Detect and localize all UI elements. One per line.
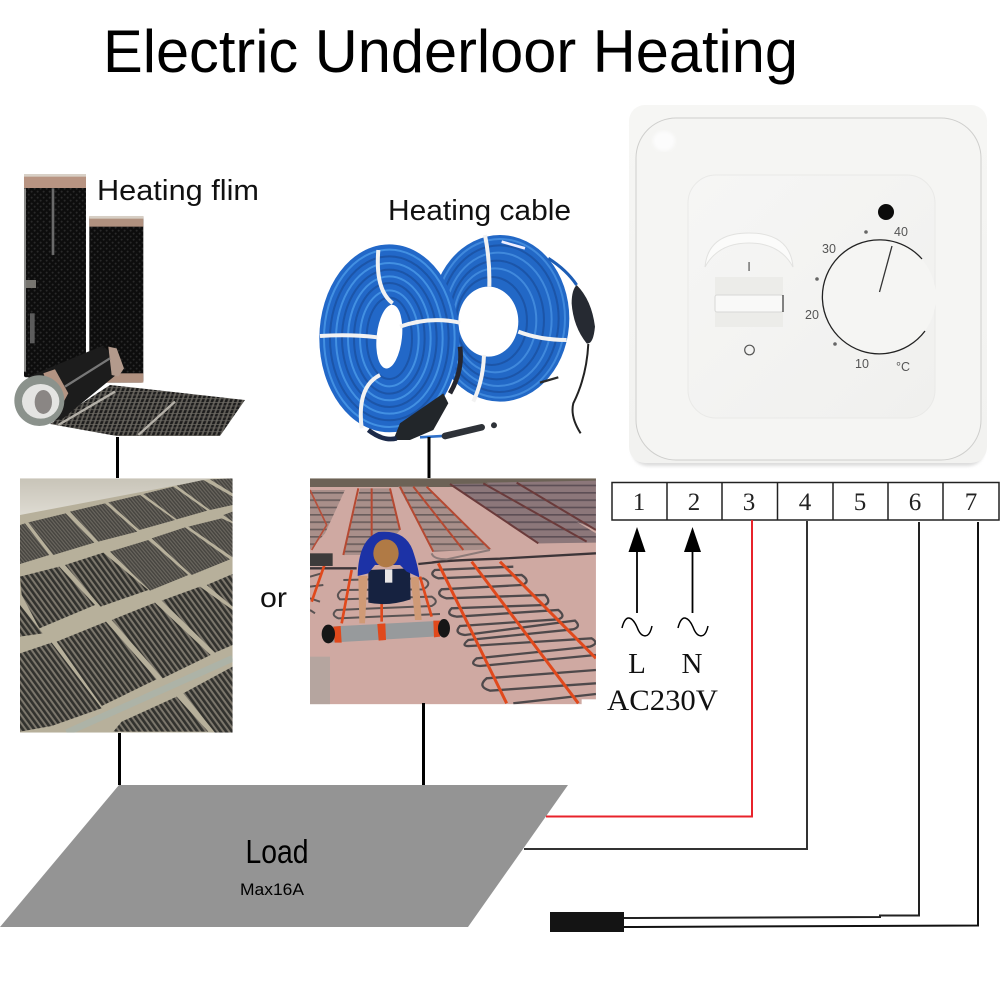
cold tail	[420, 436, 443, 437]
plate inner rim	[636, 118, 981, 460]
cable mat roll	[322, 619, 450, 643]
rocker switch	[705, 233, 793, 327]
cable control box	[393, 393, 448, 440]
AC symbol L	[622, 618, 652, 636]
upper cable mats	[310, 481, 596, 555]
terminal numbers: 7	[965, 489, 977, 516]
tall film roll	[24, 174, 86, 377]
outer plate	[629, 105, 987, 463]
unrolled film sheet	[50, 385, 245, 436]
thermostat shadow	[632, 112, 984, 466]
raised highlight	[653, 131, 675, 151]
worker	[358, 532, 422, 623]
back cable coil	[431, 235, 569, 402]
terminal numbers: 3	[743, 489, 755, 516]
terminal numbers: 6	[909, 489, 921, 516]
label: AC230V: AC230V	[607, 684, 718, 717]
label: N: N	[682, 648, 703, 680]
far film panels	[20, 478, 233, 591]
connector: film floor to load	[118, 733, 121, 785]
title: Electric Underloor Heating	[103, 18, 798, 85]
load label: Load	[246, 833, 308, 870]
dial scale numbers	[805, 225, 910, 374]
dial scale dots	[815, 230, 868, 346]
front cable coil	[319, 244, 460, 432]
wire: red load to terminal 3	[546, 520, 752, 816]
wire: sensor to terminal 6	[624, 522, 919, 918]
heading: heating film: Heating flim	[97, 175, 259, 207]
near film panels	[20, 553, 233, 733]
dial scale numbers: 10	[855, 357, 869, 371]
dial scale numbers: 40	[894, 225, 908, 239]
arrow: live to terminal 1	[628, 527, 646, 613]
control face	[688, 175, 935, 418]
wire: sensor to terminal 7	[624, 522, 978, 927]
thermostat	[629, 105, 987, 466]
dial scale numbers: °C	[896, 360, 910, 374]
terminal numbers: 1	[633, 489, 645, 516]
terminal numbers	[633, 489, 977, 516]
load parallelogram	[0, 785, 568, 927]
switch off mark	[745, 345, 754, 355]
terminal block	[612, 482, 999, 520]
terminal numbers: 5	[854, 489, 866, 516]
max current label: Max16A	[240, 880, 305, 899]
heading: heating cable: Heating cable	[388, 195, 571, 227]
panel: film installed floor photo	[20, 478, 233, 733]
panel: heating film product photo	[14, 174, 245, 436]
arrow: neutral to terminal 2	[684, 527, 701, 613]
right cable junction	[572, 285, 595, 343]
terminal numbers: 2	[688, 489, 700, 516]
dial scale numbers: 20	[805, 308, 819, 322]
connector: film roll to film floor	[116, 437, 119, 478]
panel: cable installed floor photo	[310, 478, 597, 705]
AC symbol N	[678, 618, 708, 636]
right cable mat	[432, 562, 596, 703]
temperature sensor probe	[550, 912, 624, 932]
connector: cable floor to load	[422, 703, 425, 785]
wire: black load to terminal 4	[524, 521, 807, 849]
dial scale numbers: 30	[822, 242, 836, 256]
indicator lamp	[878, 204, 894, 220]
lying film roll	[14, 345, 124, 426]
wall	[20, 478, 213, 515]
temperature dial	[822, 240, 936, 354]
main power cable	[310, 553, 596, 568]
label: L: L	[628, 648, 646, 680]
film strip highlight	[58, 392, 175, 435]
terminal numbers: 4	[799, 489, 812, 516]
switch on mark: I	[747, 259, 751, 274]
short film roll	[89, 216, 143, 383]
label: or: or	[260, 582, 287, 613]
left cable mat under worker	[310, 563, 440, 623]
panel: heating cable product photo	[319, 235, 595, 440]
connector: cable coil to cable floor	[428, 437, 430, 478]
